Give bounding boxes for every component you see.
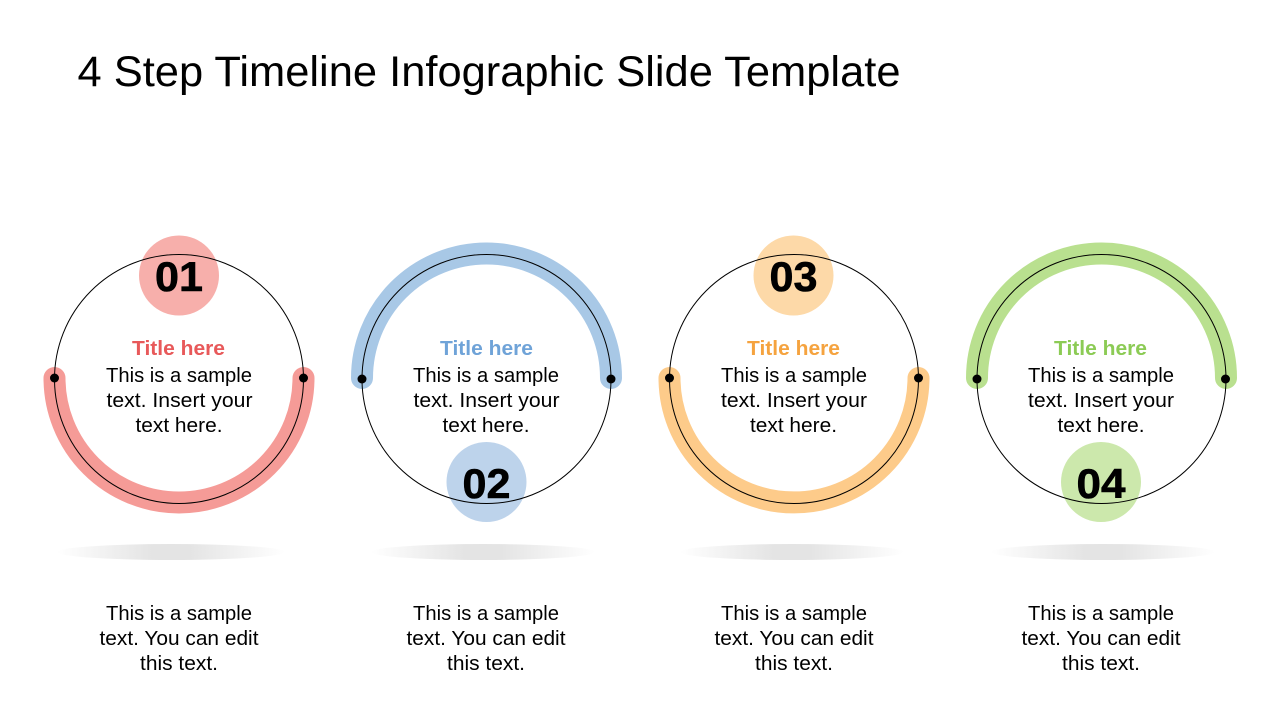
step 4 caption: this text. — [1062, 652, 1140, 675]
step 4 heading: Title here — [1054, 338, 1147, 360]
step 4 inner text: text here. — [1058, 414, 1144, 437]
step 1 number circle — [139, 236, 219, 316]
step 3 caption: text. You can edit — [714, 627, 874, 650]
step 4 inner text: This is a sample — [1028, 364, 1174, 387]
step 2 panel — [358, 253, 616, 675]
step 3 ring — [670, 254, 918, 504]
step 2 caption: This is a sample — [413, 602, 559, 625]
step 4 inner text: text. Insert your — [1028, 389, 1174, 412]
step 2 shadow — [371, 544, 595, 560]
step 3 inner text: This is a sample — [721, 364, 867, 387]
step 4 ring end dots — [972, 374, 1230, 384]
step 2 inner text: text here. — [442, 414, 530, 437]
step 2 ring end dots — [358, 374, 616, 384]
step 4 caption: text. You can edit — [1022, 627, 1181, 650]
step 3 shadow — [680, 544, 904, 560]
title: 4 Step Timeline Infographic Slide Template — [78, 48, 901, 96]
step 3 caption: this text. — [755, 652, 833, 675]
step 4 inner text — [1028, 364, 1174, 437]
step 1 caption — [100, 602, 259, 675]
step 1 panel — [50, 236, 308, 675]
step 3 inner text: text here. — [750, 414, 837, 437]
step 1 ring end dots — [50, 374, 308, 382]
step 1 heading: Title here — [132, 338, 225, 360]
step 3 heading: Title here — [747, 338, 840, 360]
step 3 ring end dots — [665, 374, 923, 382]
step 3 arc — [670, 378, 918, 502]
step 1 caption: text. You can edit — [100, 627, 259, 650]
step 2 caption: text. You can edit — [406, 627, 566, 650]
step 4 ring — [977, 254, 1226, 504]
step 3 caption — [714, 602, 874, 675]
step 3 number circle — [754, 236, 834, 316]
step 4 panel — [972, 253, 1230, 675]
step 4 number circle — [1061, 442, 1141, 522]
step 2 number circle — [446, 442, 526, 522]
step 3 inner text: text. Insert your — [721, 389, 867, 412]
step 1 shadow — [57, 544, 285, 560]
step 1 inner text: text here. — [136, 414, 222, 437]
step 1 arc — [54, 378, 304, 502]
step 1 inner text: This is a sample — [106, 364, 252, 387]
step 2 caption — [406, 602, 566, 675]
step 4 caption: This is a sample — [1028, 602, 1174, 625]
step 1 inner text — [106, 364, 253, 437]
step 2 arc — [362, 253, 611, 378]
step 3 inner text — [721, 364, 867, 437]
step 2 inner text — [413, 364, 560, 437]
step 2 inner text: text. Insert your — [414, 389, 560, 412]
step 4 arc — [977, 253, 1226, 378]
step 4 shadow — [991, 544, 1215, 560]
step 1 ring — [54, 254, 304, 504]
step 2 caption: this text. — [447, 652, 525, 675]
step 2 ring — [362, 254, 611, 504]
step 4 number: 04 — [1076, 460, 1126, 507]
step 1 caption: this text. — [140, 652, 218, 675]
step 3 caption: This is a sample — [721, 602, 867, 625]
step 2 number: 02 — [462, 460, 510, 507]
step 1 caption: This is a sample — [106, 602, 252, 625]
step 1 number: 01 — [155, 253, 203, 300]
step 1 inner text: text. Insert your — [106, 389, 253, 412]
step 3 number: 03 — [770, 253, 818, 300]
step 3 panel — [665, 236, 923, 675]
step 2 heading: Title here — [440, 338, 533, 360]
step 4 caption — [1022, 602, 1181, 675]
step 2 inner text: This is a sample — [413, 364, 559, 387]
